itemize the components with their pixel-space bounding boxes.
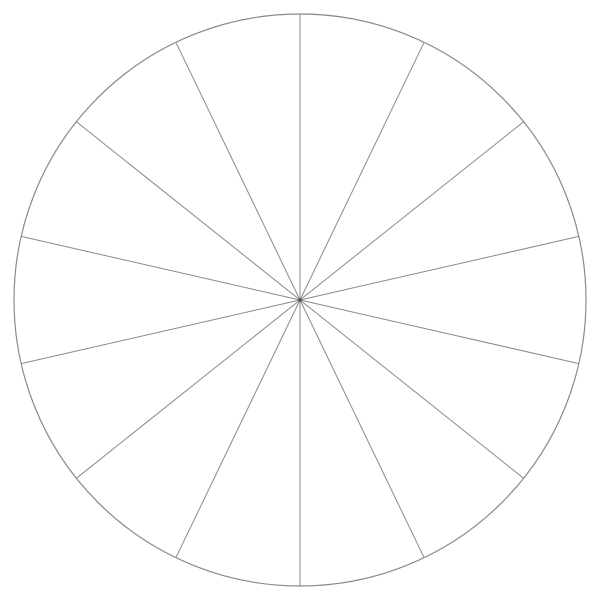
center point bbox=[298, 298, 302, 302]
